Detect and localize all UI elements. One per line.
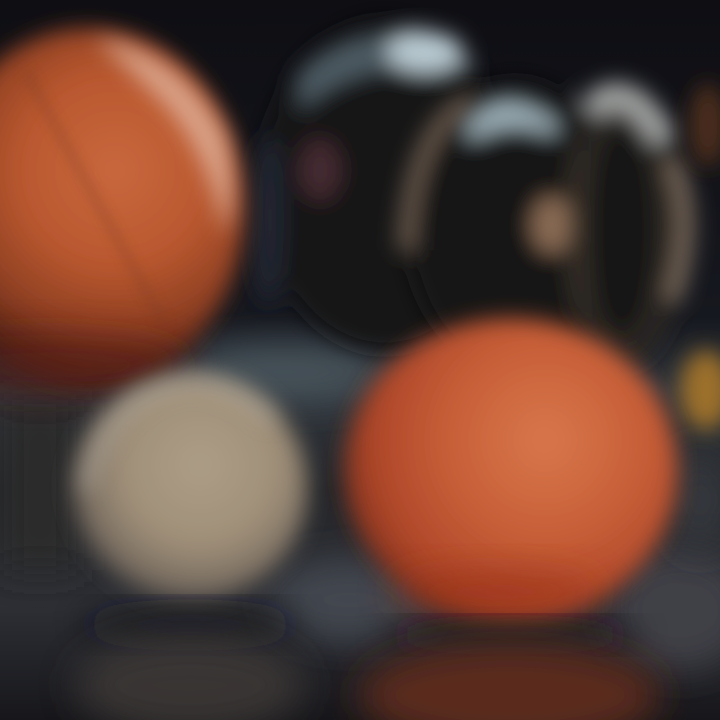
cream ball rim light	[85, 380, 275, 490]
large orange basketball, left	[0, 28, 244, 395]
dumbbell: front dark plates	[405, 80, 687, 370]
basketball seam	[25, 70, 165, 325]
front ball lower shade	[390, 570, 600, 614]
dumbbell: rear dark sphere	[252, 20, 510, 350]
right edge warm highlights	[680, 83, 720, 430]
contact shadows and reflections on table	[75, 611, 660, 720]
front orange ball	[344, 318, 678, 622]
shade at bottom of basketball	[0, 335, 190, 395]
cream ball	[72, 374, 308, 602]
highlight on basketball	[95, 38, 232, 235]
